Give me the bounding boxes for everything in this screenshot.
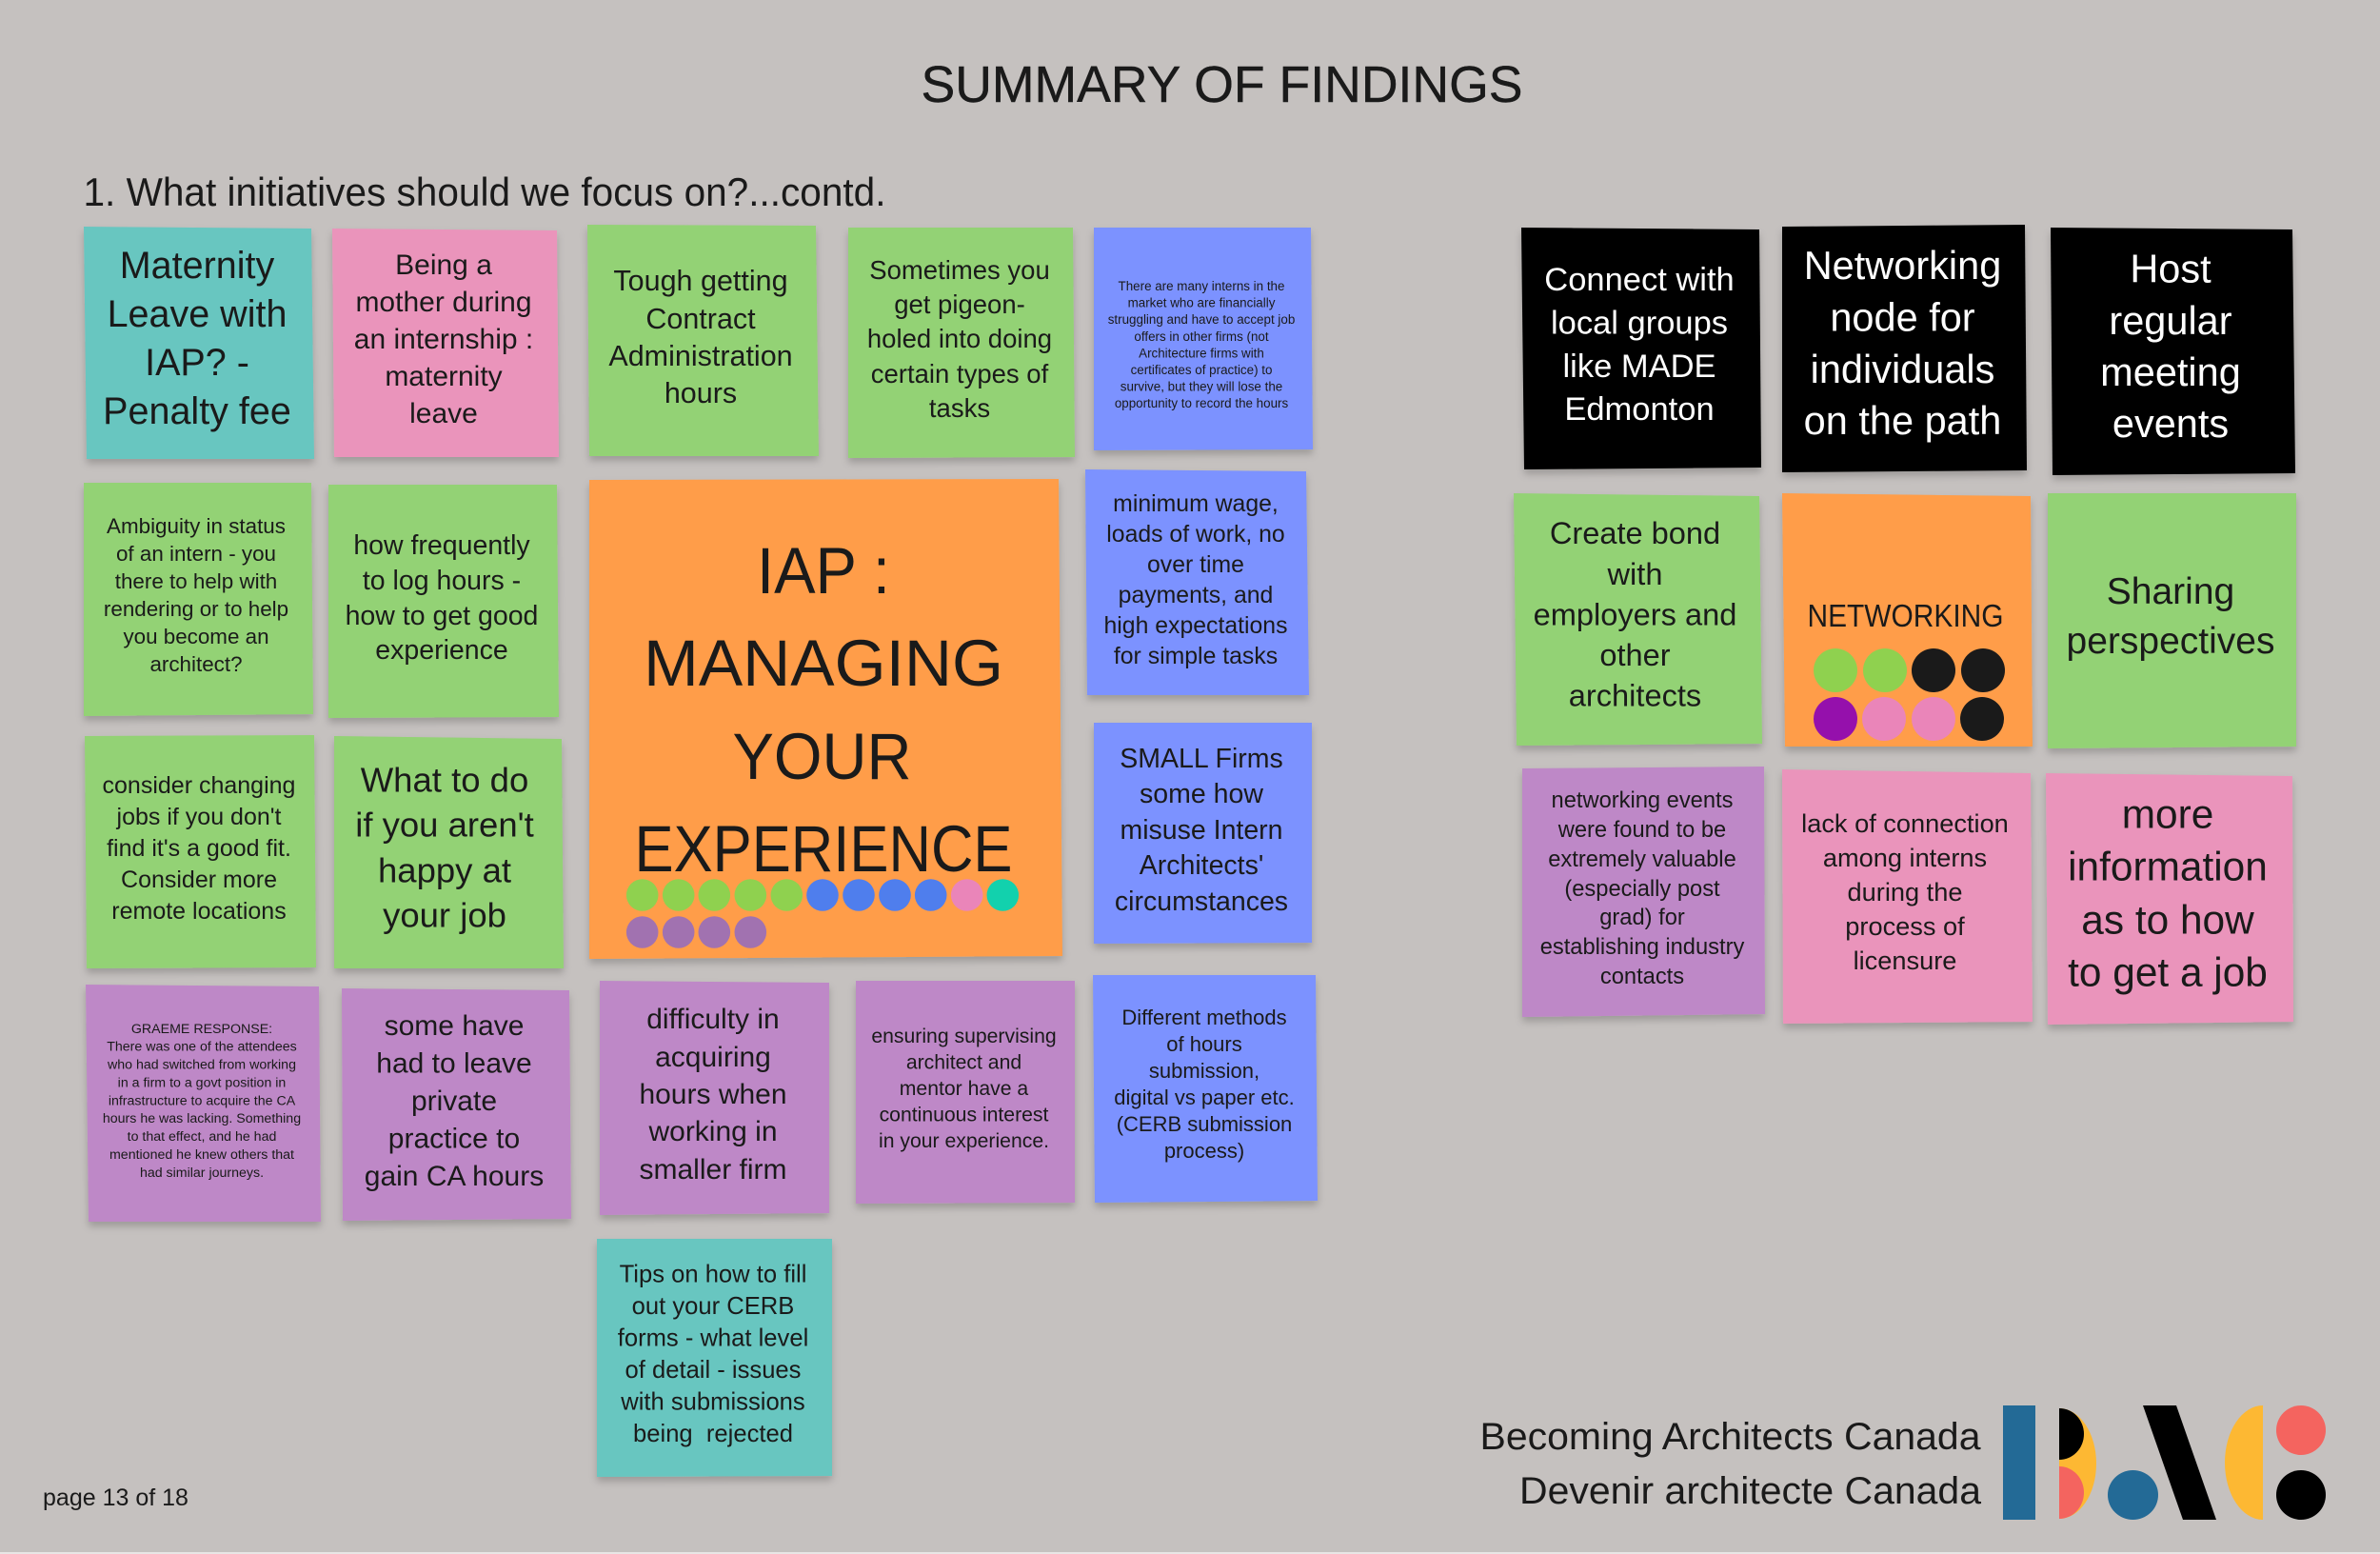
- note: leave private practice: some have: [385, 1010, 524, 1042]
- note: small firms: SMALL Firms: [1120, 744, 1283, 774]
- note: being a mother: Being a: [395, 249, 492, 281]
- note: create bond: with: [1607, 556, 1662, 591]
- note: create bond: architects: [1569, 678, 1701, 712]
- central note: IAP managing your experience: YOUR: [733, 720, 912, 793]
- note: difficulty acquiring hours: difficulty in: [646, 1004, 780, 1035]
- note: financially struggling interns: certificates of practice) to: [1131, 363, 1272, 377]
- note: methods of hours submission: digital vs paper etc.: [1114, 1086, 1295, 1109]
- note: pigeon-holed: [848, 228, 1075, 458]
- note: financially struggling interns: Architecture firms with: [1139, 346, 1264, 360]
- note: supervising architect and mentor: ensuring supervising: [871, 1026, 1057, 1047]
- note: being a mother: maternity: [385, 361, 503, 392]
- note: CERB forms tips: out your CERB: [632, 1293, 794, 1320]
- note: networking node: individuals: [1811, 347, 1994, 391]
- note: networking node: Networking: [1804, 243, 2001, 288]
- note: connect with local groups: like MADE: [1562, 349, 1716, 385]
- note: methods of hours submission: submission,: [1149, 1059, 1259, 1083]
- note: networking events valuable: were found to be: [1557, 818, 1726, 843]
- note: create bond: Create bond: [1550, 515, 1720, 550]
- note: small firms: [1094, 723, 1312, 944]
- organisation name: Becoming Architects Canada: [1479, 1416, 1981, 1458]
- page number: page 13 of 18: [43, 1484, 188, 1511]
- note: logging hours: how frequently: [353, 530, 530, 561]
- note: Graeme response: hours he was lacking. Something: [103, 1111, 301, 1126]
- note: minimum wage: over time: [1147, 552, 1244, 578]
- note: financially struggling interns: [1094, 228, 1313, 450]
- note: more information: as to how: [2081, 897, 2254, 943]
- note: contract administration: Administration: [608, 340, 793, 372]
- note: pigeon-holed: tasks: [929, 393, 990, 423]
- note: being a mother: [332, 229, 559, 457]
- organisation name: [1479, 1416, 1982, 1512]
- note: small firms: circumstances: [1115, 887, 1288, 917]
- central note: IAP managing your experience: EXPERIENCE: [634, 812, 1013, 886]
- title: SUMMARY OF FINDINGS: [922, 57, 1523, 113]
- central note: IAP managing your experience: [589, 479, 1062, 959]
- note: pigeon-holed: holed into doing: [867, 324, 1052, 353]
- note: CERB forms tips: forms - what level: [618, 1325, 808, 1352]
- note: ambiguity in status: Ambiguity in status: [107, 514, 286, 538]
- note: Graeme response: infrastructure to acquire the CA: [109, 1094, 296, 1109]
- note: more information: to get a job: [2068, 950, 2268, 994]
- note: methods of hours submission: [1093, 975, 1318, 1203]
- logo: BAC: [2003, 1405, 2326, 1520]
- note: financially struggling interns: market who are financially: [1128, 296, 1276, 310]
- note: maternity leave: [84, 227, 314, 459]
- note: being a mother: leave: [409, 398, 478, 429]
- note: not happy at job: [334, 736, 564, 968]
- note: host meeting events: Host: [2130, 246, 2211, 291]
- note: minimum wage: loads of work, no: [1106, 522, 1285, 548]
- note: minimum wage: [1085, 469, 1309, 695]
- note: not happy at job: What to do: [361, 760, 528, 800]
- note: supervising architect and mentor: architect and: [906, 1051, 1021, 1074]
- note: logging hours: to log hours -: [363, 566, 521, 596]
- note: maternity leave: IAP? -: [145, 342, 249, 384]
- note: small firms: some how: [1140, 779, 1263, 809]
- note: consider changing jobs: find it's a good fit.: [107, 835, 291, 862]
- note: ambiguity in status: [84, 483, 313, 716]
- note: pigeon-holed: get pigeon-: [894, 289, 1025, 319]
- note: difficulty acquiring hours: [600, 981, 829, 1215]
- note: more information: [2046, 773, 2293, 1025]
- note: ambiguity in status: rendering or to help: [104, 597, 288, 621]
- note: supervising architect and mentor: in your experience.: [879, 1130, 1049, 1152]
- note: networking theme: [1782, 493, 2033, 747]
- note: not happy at job: happy at: [378, 851, 511, 889]
- note: not happy at job: your job: [383, 895, 506, 935]
- note: connect with local groups: local groups: [1551, 305, 1728, 341]
- note: Graeme response: had similar journeys.: [140, 1166, 264, 1181]
- note: consider changing jobs: consider changing: [103, 772, 295, 799]
- note: supervising architect and mentor: mentor have a: [900, 1078, 1028, 1100]
- note: being a mother: an internship :: [354, 324, 533, 355]
- note: small firms: misuse Intern: [1120, 815, 1283, 846]
- note: lack of connection: process of: [1845, 911, 1965, 941]
- note: not happy at job: if you aren't: [355, 806, 534, 844]
- note: networking events valuable: [1522, 767, 1765, 1017]
- note: methods of hours submission: of hours: [1166, 1032, 1242, 1056]
- note: financially struggling interns: survive, but they will lose the: [1121, 380, 1282, 394]
- note: financially struggling interns: struggling and have to accept job: [1108, 312, 1295, 327]
- organisation name: Devenir architecte Canada: [1519, 1470, 1982, 1512]
- note: difficulty acquiring hours: hours when: [639, 1079, 787, 1110]
- note: lack of connection: licensure: [1854, 946, 1956, 975]
- note: minimum wage: payments, and: [1119, 583, 1273, 608]
- note: networking events valuable: grad) for: [1599, 906, 1685, 930]
- note: leave private practice: [342, 988, 571, 1221]
- note: ambiguity in status: of an intern - you: [116, 542, 276, 566]
- note: financially struggling interns: offers in other firms (not: [1134, 329, 1269, 344]
- note: more information: information: [2068, 844, 2268, 889]
- note: Graeme response: to that effect, and he had: [128, 1129, 276, 1145]
- section heading: 1. What initiatives should we focus on?...contd.: [84, 169, 885, 214]
- note: CERB forms tips: of detail - issues: [625, 1357, 801, 1384]
- note: contract administration: hours: [664, 377, 737, 409]
- note: methods of hours submission: Different methods: [1121, 1006, 1287, 1029]
- note: sharing perspectives: perspectives: [2067, 621, 2274, 662]
- note: minimum wage: minimum wage,: [1113, 491, 1279, 517]
- note: leave private practice: private: [411, 1086, 497, 1117]
- note: ambiguity in status: architect?: [149, 652, 243, 676]
- note: networking theme: NETWORKING: [1807, 598, 2003, 633]
- note: leave private practice: had to leave: [376, 1047, 532, 1080]
- note: lack of connection: among interns: [1823, 843, 1987, 872]
- note: host meeting events: regular: [2109, 298, 2232, 343]
- note: connect with local groups: Edmonton: [1564, 391, 1715, 428]
- note: connect with local groups: [1521, 228, 1761, 469]
- central note: IAP managing your experience: IAP :: [757, 534, 890, 608]
- note: ambiguity in status: there to help with: [115, 569, 277, 593]
- note: pigeon-holed: Sometimes you: [869, 255, 1050, 285]
- note: lack of connection: during the: [1848, 877, 1962, 906]
- note: maternity leave: Maternity: [120, 245, 274, 287]
- note: consider changing jobs: [85, 735, 316, 968]
- note: networking node: [1782, 225, 2027, 472]
- note: networking node: on the path: [1804, 398, 2001, 443]
- note: networking events valuable: extremely valuable: [1548, 847, 1736, 872]
- note: host meeting events: [2051, 228, 2295, 475]
- note: host meeting events: events: [2112, 401, 2229, 446]
- central note: IAP managing your experience: MANAGING: [644, 627, 1003, 700]
- note: small firms: Architects': [1140, 850, 1263, 881]
- note: logging hours: [328, 485, 559, 718]
- note: Graeme response: mentioned he knew others that: [109, 1147, 294, 1163]
- note: Graeme response: [86, 985, 321, 1222]
- note: CERB forms tips: [597, 1239, 832, 1477]
- note: difficulty acquiring hours: acquiring: [655, 1042, 771, 1073]
- note: networking events valuable: networking events: [1552, 788, 1733, 813]
- note: CERB forms tips: with submissions: [620, 1388, 805, 1415]
- note: leave private practice: gain CA hours: [365, 1161, 544, 1192]
- note: lack of connection: [1782, 769, 2033, 1024]
- note: pigeon-holed: certain types of: [871, 359, 1049, 388]
- note: difficulty acquiring hours: smaller firm: [640, 1154, 786, 1185]
- note: leave private practice: practice to: [388, 1124, 520, 1154]
- note: ambiguity in status: you become an: [123, 625, 269, 648]
- note: supervising architect and mentor: continuous interest: [880, 1105, 1049, 1126]
- note: difficulty acquiring hours: working in: [647, 1116, 778, 1147]
- note: create bond: [1514, 493, 1762, 746]
- note: being a mother: mother during: [355, 287, 532, 318]
- note: sharing perspectives: [2048, 493, 2296, 748]
- note: consider changing jobs: Consider more: [121, 867, 277, 893]
- note: logging hours: how to get good: [346, 601, 538, 631]
- note: networking events valuable: (especially post: [1564, 877, 1720, 902]
- note: create bond: employers and: [1534, 596, 1736, 632]
- note: contract administration: [587, 225, 819, 456]
- note: logging hours: experience: [375, 635, 508, 666]
- note: more information: more: [2122, 792, 2213, 836]
- note: methods of hours submission: process): [1164, 1139, 1244, 1163]
- note: maternity leave: Penalty fee: [103, 390, 291, 432]
- note: networking node: node for: [1830, 295, 1975, 339]
- note: minimum wage: high expectations: [1104, 613, 1287, 639]
- note: sharing perspectives: Sharing: [2107, 571, 2234, 612]
- note: networking events valuable: establishing industry: [1540, 935, 1744, 960]
- note: Graeme response: in a firm to a govt position in: [118, 1076, 286, 1091]
- note: Graeme response: There was one of the attendees: [107, 1040, 297, 1055]
- networking vote dots: [1814, 648, 2005, 741]
- vote dots: [626, 879, 1019, 948]
- note: Graeme response: GRAEME RESPONSE:: [131, 1022, 272, 1037]
- note: networking events valuable: contacts: [1600, 965, 1684, 989]
- note: contract administration: Tough getting: [613, 265, 788, 297]
- note: consider changing jobs: remote locations: [111, 898, 287, 925]
- note: minimum wage: for simple tasks: [1114, 644, 1278, 669]
- note: contract administration: Contract: [645, 303, 756, 335]
- note: Graeme response: who had switched from working: [107, 1058, 296, 1073]
- note: lack of connection: lack of connection: [1801, 808, 2009, 838]
- note: methods of hours submission: (CERB submission: [1117, 1112, 1292, 1136]
- note: financially struggling interns: There are many interns in the: [1119, 279, 1284, 293]
- note: supervising architect and mentor: [856, 981, 1075, 1204]
- note: CERB forms tips: Tips on how to fill: [620, 1261, 806, 1287]
- note: CERB forms tips: being rejected: [633, 1421, 793, 1447]
- note: maternity leave: Leave with: [108, 293, 287, 335]
- note: host meeting events: meeting: [2100, 349, 2241, 394]
- note: create bond: other: [1599, 637, 1671, 672]
- note: financially struggling interns: opportunity to record the hours: [1115, 396, 1288, 410]
- note: connect with local groups: Connect with: [1544, 262, 1735, 298]
- note: consider changing jobs: jobs if you don't: [116, 804, 282, 830]
